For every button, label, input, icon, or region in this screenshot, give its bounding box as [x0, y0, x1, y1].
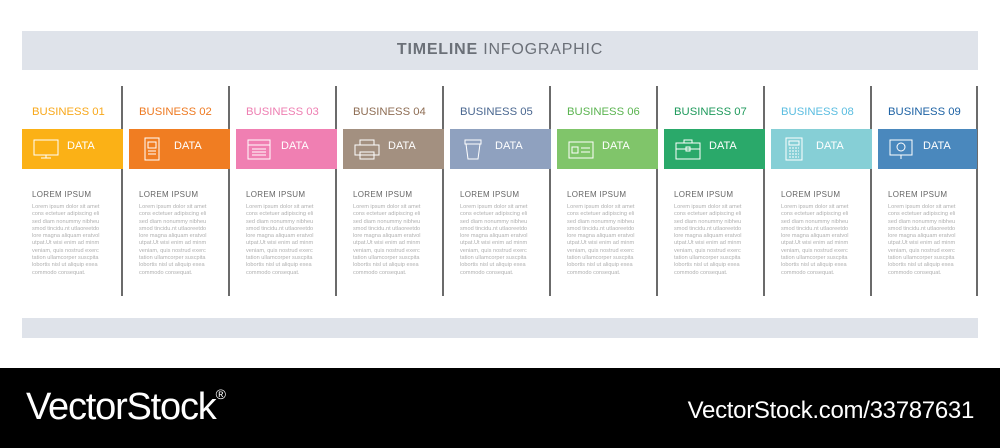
column 09 [878, 106, 977, 276]
column 04: BUSINESS 04 [353, 106, 426, 118]
column 08 [771, 106, 872, 276]
column 05: BUSINESS 05 [460, 106, 533, 118]
column 02: Lorem ipsum dolor sit amet cons ectetuer adipiscing eli sed diam nonummy nibheu smod tincidu.nt utlaoreetdo lore magna aliquam eratvol utpat.Ut wisi enim ad minm veniam, quis nostrud exerc tation ullamcorper suscpita lobortis nisl ut aliquip exea commodo consequat. [139, 204, 206, 276]
column 04 [343, 106, 444, 276]
column 02: BUSINESS 02 [139, 106, 212, 118]
column 01: BUSINESS 01 [32, 106, 105, 118]
column 05: DATA [495, 140, 523, 152]
column 08: LOREM IPSUM [781, 190, 840, 199]
column 07: LOREM IPSUM [674, 190, 733, 199]
footer: VectorStock® [26, 386, 225, 428]
column 08: Lorem ipsum dolor sit amet cons ectetuer adipiscing eli sed diam nonummy nibheu smod tincidu.nt utlaoreetdo lore magna aliquam eratvol utpat.Ut wisi enim ad minm veniam, quis nostrud exerc tation ullamcorper suscpita lobortis nisl ut aliquip exea commodo consequat. [781, 204, 848, 276]
column 09: BUSINESS 09 [888, 106, 961, 118]
column 03: LOREM IPSUM [246, 190, 305, 199]
column 02: DATA [174, 140, 202, 152]
column 09: Lorem ipsum dolor sit amet cons ectetuer adipiscing eli sed diam nonummy nibheu smod tincidu.nt utlaoreetdo lore magna aliquam eratvol utpat.Ut wisi enim ad minm veniam, quis nostrud exerc tation ullamcorper suscpita lobortis nisl ut aliquip exea commodo consequat. [888, 204, 955, 276]
column 07: DATA [709, 140, 737, 152]
column 01: DATA [67, 140, 95, 152]
column 03: BUSINESS 03 [246, 106, 319, 118]
column 06 [557, 106, 658, 276]
column 01: LOREM IPSUM [32, 190, 91, 199]
column 07 [664, 106, 765, 276]
footer [0, 368, 1000, 448]
column 09: LOREM IPSUM [888, 190, 947, 199]
header band [22, 31, 978, 70]
column 07: BUSINESS 07 [674, 106, 747, 118]
column 04: Lorem ipsum dolor sit amet cons ectetuer adipiscing eli sed diam nonummy nibheu smod tincidu.nt utlaoreetdo lore magna aliquam eratvol utpat.Ut wisi enim ad minm veniam, quis nostrud exerc tation ullamcorper suscpita lobortis nisl ut aliquip exea commodo consequat. [353, 204, 420, 276]
title: TIMELINE INFOGRAPHIC [397, 41, 603, 58]
column 06: LOREM IPSUM [567, 190, 626, 199]
column 01: Lorem ipsum dolor sit amet cons ectetuer adipiscing eli sed diam nonummy nibheu smod tincidu.nt utlaoreetdo lore magna aliquam eratvol utpat.Ut wisi enim ad minm veniam, quis nostrud exerc tation ullamcorper suscpita lobortis nisl ut aliquip exea commodo consequat. [32, 204, 99, 276]
column 06: Lorem ipsum dolor sit amet cons ectetuer adipiscing eli sed diam nonummy nibheu smod tincidu.nt utlaoreetdo lore magna aliquam eratvol utpat.Ut wisi enim ad minm veniam, quis nostrud exerc tation ullamcorper suscpita lobortis nisl ut aliquip exea commodo consequat. [567, 204, 634, 276]
column 09: DATA [923, 140, 951, 152]
column 06: DATA [602, 140, 630, 152]
column 08: BUSINESS 08 [781, 106, 854, 118]
dividers [121, 86, 123, 296]
column 06: BUSINESS 06 [567, 106, 640, 118]
column 02 [129, 106, 230, 276]
column 08: DATA [816, 140, 844, 152]
column 05: LOREM IPSUM [460, 190, 519, 199]
bottom band [22, 318, 978, 338]
footer: VectorStock.com/33787631 [688, 397, 974, 424]
column 05 [450, 106, 551, 276]
column 01 [22, 106, 123, 276]
column 03: DATA [281, 140, 309, 152]
column 04: DATA [388, 140, 416, 152]
column 03: Lorem ipsum dolor sit amet cons ectetuer adipiscing eli sed diam nonummy nibheu smod tincidu.nt utlaoreetdo lore magna aliquam eratvol utpat.Ut wisi enim ad minm veniam, quis nostrud exerc tation ullamcorper suscpita lobortis nisl ut aliquip exea commodo consequat. [246, 204, 313, 276]
column 04: LOREM IPSUM [353, 190, 412, 199]
column 03 [236, 106, 337, 276]
column 07: Lorem ipsum dolor sit amet cons ectetuer adipiscing eli sed diam nonummy nibheu smod tincidu.nt utlaoreetdo lore magna aliquam eratvol utpat.Ut wisi enim ad minm veniam, quis nostrud exerc tation ullamcorper suscpita lobortis nisl ut aliquip exea commodo consequat. [674, 204, 741, 276]
column 05: Lorem ipsum dolor sit amet cons ectetuer adipiscing eli sed diam nonummy nibheu smod tincidu.nt utlaoreetdo lore magna aliquam eratvol utpat.Ut wisi enim ad minm veniam, quis nostrud exerc tation ullamcorper suscpita lobortis nisl ut aliquip exea commodo consequat. [460, 204, 527, 276]
column 02: LOREM IPSUM [139, 190, 198, 199]
